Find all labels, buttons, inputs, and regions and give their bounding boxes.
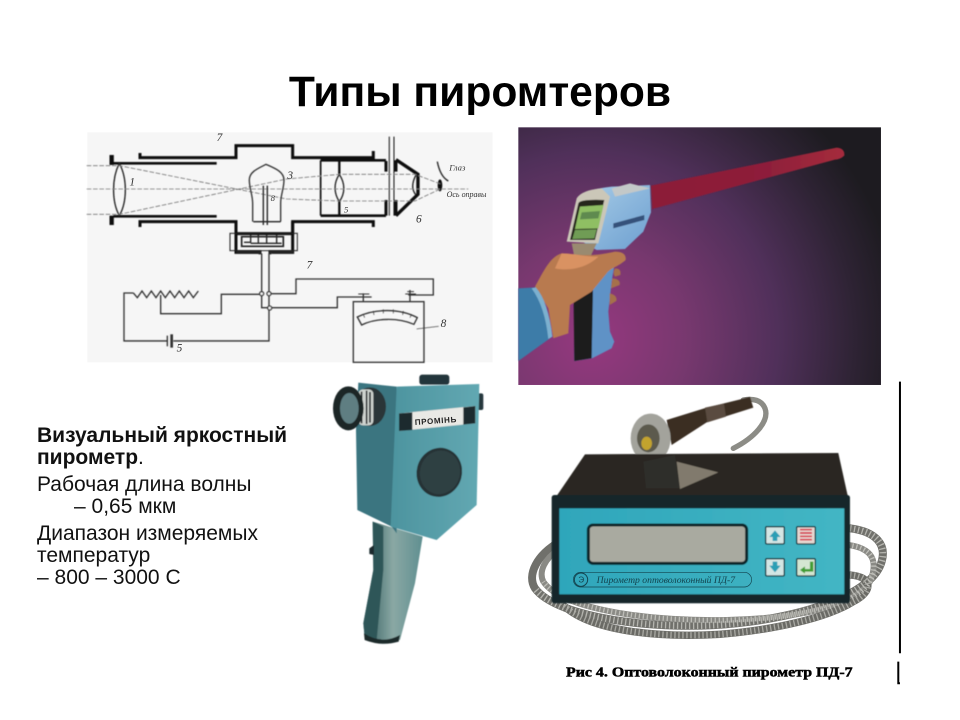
sensor head bbox=[631, 397, 753, 463]
diagram labels: 6 bbox=[416, 213, 422, 225]
objective tube bbox=[112, 155, 217, 225]
right border line bbox=[898, 382, 900, 683]
photo: fibre-optic pyrometer PD-7 bbox=[532, 382, 900, 683]
hand and sleeve bbox=[535, 252, 626, 338]
text block: pyrometer characteristics: – 0,65 мкм bbox=[74, 495, 176, 518]
nameplate bbox=[399, 406, 475, 431]
photo: fibre-optic pyrometer PD-7: Э bbox=[578, 576, 584, 585]
lamp bbox=[249, 164, 284, 225]
diagram labels: Глаз bbox=[448, 162, 466, 172]
pyrometer grip bbox=[574, 262, 615, 361]
device front bbox=[552, 495, 850, 603]
diagram labels: 8 bbox=[271, 193, 276, 203]
photo: fibre-optic pyrometer PD-7: Пирометр оптоволоконный ПД-7 bbox=[596, 575, 736, 586]
diagram labels: 1 bbox=[129, 177, 135, 189]
outer housing bbox=[140, 146, 373, 252]
photo: Promin visual brightness pyrometer: ПРОМІНЬ bbox=[415, 415, 457, 427]
diagram labels: 7 bbox=[307, 259, 314, 271]
photo: Promin visual brightness pyrometer bbox=[333, 375, 483, 644]
circuit wiring bbox=[124, 253, 433, 348]
top knob bbox=[419, 375, 449, 385]
eyepiece tube bbox=[321, 137, 418, 216]
text block: pyrometer characteristics: Визуальный яркостный bbox=[37, 424, 287, 447]
diagram labels: 3 bbox=[286, 170, 293, 182]
display bezel bbox=[567, 188, 610, 243]
diagram labels: 8 bbox=[441, 318, 447, 330]
rheostat box bbox=[230, 233, 297, 254]
text block: pyrometer characteristics: пирометр. bbox=[37, 446, 144, 469]
eyepiece bbox=[354, 387, 386, 426]
device top bbox=[555, 453, 848, 498]
round side cover bbox=[411, 443, 468, 502]
voltmeter bbox=[353, 302, 439, 362]
laser beam bbox=[651, 148, 844, 209]
schematic diagram of visual pyrometer bbox=[87, 132, 493, 362]
diagram labels: Ось оправы bbox=[447, 190, 487, 199]
text block: pyrometer characteristics: – 800 – 3000 С bbox=[37, 566, 181, 589]
text block: pyrometer characteristics bbox=[37, 424, 287, 589]
fibre cable coil bbox=[532, 399, 883, 635]
LCD screen bbox=[588, 525, 747, 563]
grip bbox=[363, 522, 423, 640]
mount bracket bbox=[643, 455, 680, 488]
title: Типы пиромтеров bbox=[289, 68, 671, 116]
control buttons bbox=[766, 527, 815, 576]
text block: pyrometer characteristics: Рабочая длина волны bbox=[37, 473, 252, 496]
housing bbox=[356, 383, 397, 533]
optical rays bbox=[87, 166, 468, 214]
diagram labels: 5 bbox=[344, 204, 349, 214]
model label bbox=[573, 572, 752, 587]
photo: infrared handheld pyrometer bbox=[518, 127, 881, 385]
caption: Рис 4. Оптоволоконный пирометр ПД-7 bbox=[566, 665, 853, 680]
diagram labels: 5 bbox=[177, 343, 183, 355]
text block: pyrometer characteristics: Диапазон измеряемых bbox=[37, 522, 258, 545]
pyrometer head bbox=[577, 185, 651, 250]
lenses bbox=[114, 162, 448, 216]
text block: pyrometer characteristics: температур bbox=[37, 544, 150, 567]
diagram labels bbox=[129, 132, 487, 355]
diagram labels: 7 bbox=[217, 132, 224, 144]
